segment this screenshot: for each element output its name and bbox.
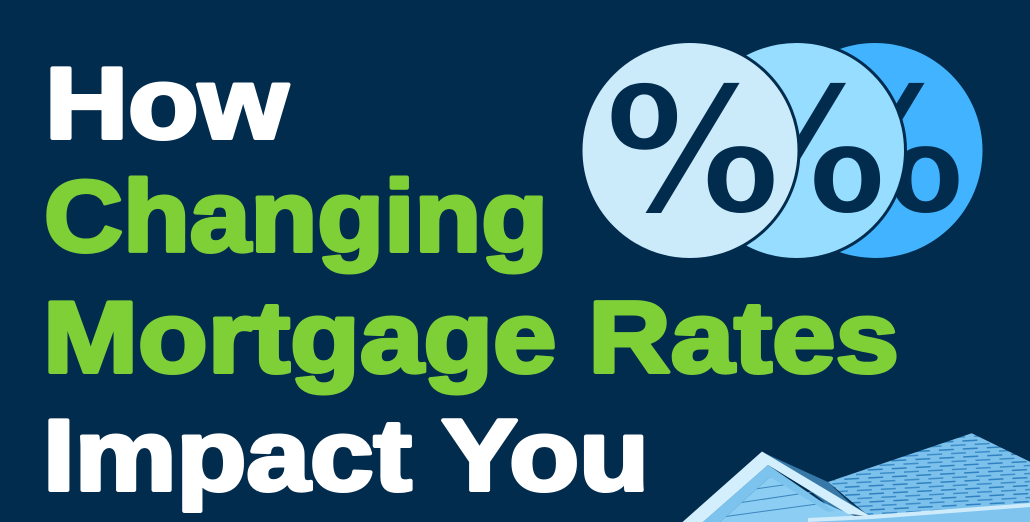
title line: Changing: Changing [44,161,548,273]
title line: How: How [45,48,288,160]
inner gable trim [703,465,835,522]
gable trim [682,452,870,522]
house roof illustration [682,433,1030,522]
main shingled roof [828,433,1030,517]
gable siding [720,477,870,522]
title [43,48,899,512]
eave highlight [808,503,1030,522]
middle percent circle: % [711,49,887,254]
title line: Mortgage Rates: Mortgage Rates [43,282,899,394]
title line: Impact You: Impact You [43,400,649,512]
gable side roof shadow [762,452,870,516]
back percent circle: % [789,49,966,254]
eave fascia [808,505,1030,522]
icon: overlapping percent circles [581,42,982,260]
siding lines [722,484,832,517]
front percent circle: % [604,49,781,254]
